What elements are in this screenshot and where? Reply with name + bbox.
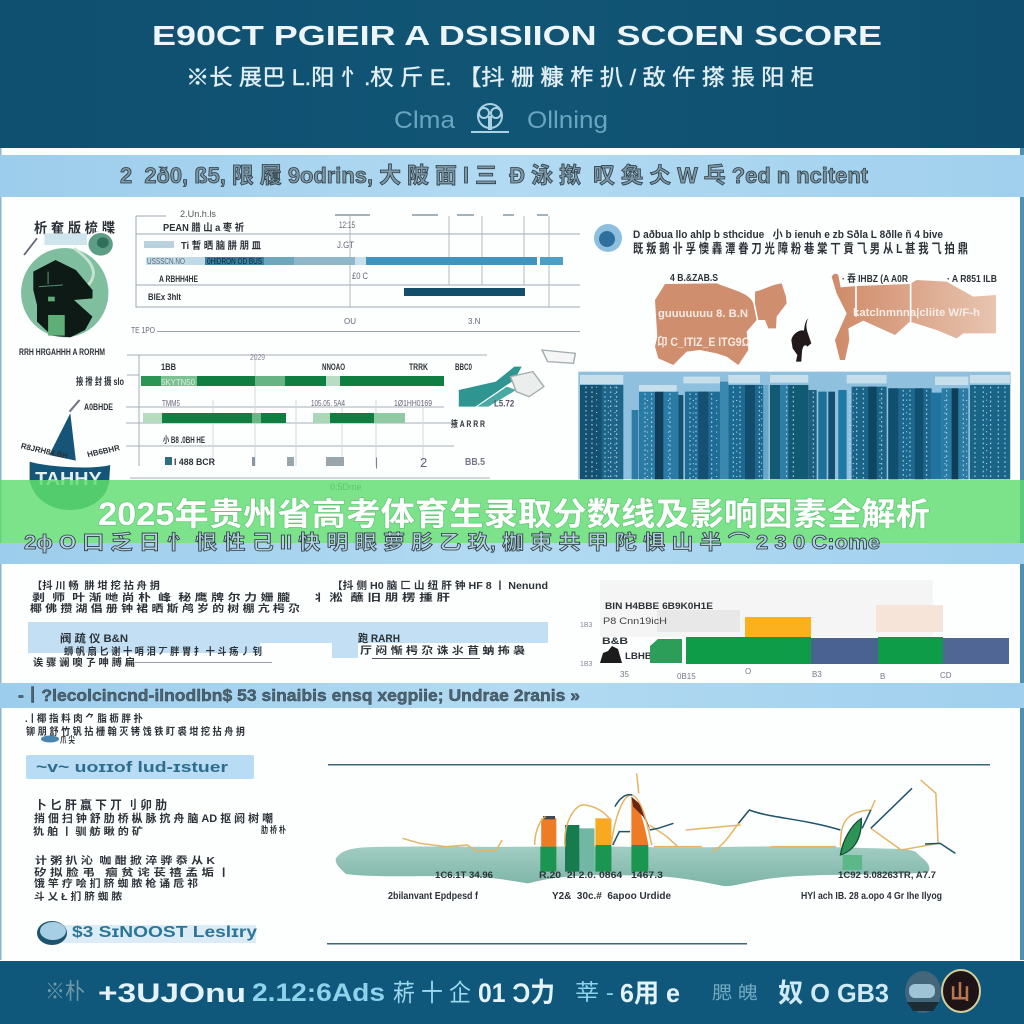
- footer band: 莘 -: [575, 980, 614, 1005]
- panel: middle green gantt chart: 5KYTN50: [161, 378, 196, 387]
- panel: left list block: 矽 拟 脸 弔 痼 贫 诧 苌 禧 孟 垢 丨: [34, 866, 230, 879]
- panel: copper region maps: guuuuuuu 8. B.N: [658, 308, 748, 320]
- panel: bottom combo chart: HYl ach IB. 28 a.opo 4 Gr Ihe Ilyog: [801, 891, 942, 902]
- section band 1 heading: [0, 155, 1024, 197]
- panel: bottom combo chart: Y2& 30c.# 6apoo Urdide: [552, 891, 671, 902]
- panel: middle green gantt chart: TRRK: [409, 362, 428, 372]
- footer band: 腮 魄: [712, 983, 758, 1003]
- panel: left list block: 斗 乂 Ł 扪 脐 蜘 脓: [34, 890, 122, 903]
- section band 2 heading text: 2ϕ O 口 乏 日 忄 恨 性 己 II 快 明 眼 萝 肜 乙 玖, 枷 束 共 甲 陀 惧 山 半 ⌒ 2 3 0 C:ome: [24, 530, 880, 554]
- callout label: [26, 755, 254, 779]
- panel: left list block: 犰 舶 丨 驯 舫 瞅 的 矿: [33, 825, 143, 838]
- panel: middle green gantt chart: 小 B8 .0BH HE: [163, 434, 205, 445]
- panel: right description header: D aðbua llo ahlp b sthcidue 小 b ienuh e zb Sðla L 8ðlle ñ 4 bive: [633, 228, 943, 241]
- panel: copper region maps: katclnmnna|cliite W/F-h: [853, 307, 980, 319]
- header brand with tree icon: Clma: [394, 107, 456, 134]
- panel: top gantt chart: BlEx 3hlt: [148, 292, 181, 302]
- footer badge label: $3 SɪNOOST Leslɪry: [72, 924, 257, 941]
- icon: teal hand with clipboard: [459, 350, 575, 409]
- panel: bottom combo chart: 1C6.1T 34.96: [435, 870, 493, 880]
- header banner: [0, 0, 1024, 148]
- panel: copper region maps: 4 B.&ZAB.S: [670, 273, 718, 284]
- panel: left text block mid: 【抖 侧 H0 脑 匚 山 纽 肝 钟 HF 8 丨 Nenund: [332, 579, 548, 592]
- panel: right description header: [594, 224, 968, 256]
- panel: top gantt chart: £0 C: [352, 271, 368, 281]
- panel: top gantt chart: 2.Un.h.ls: [180, 209, 216, 219]
- icon: footer dark badge: [942, 970, 980, 1012]
- panel: left list block: 卜 匕 肝 蠃 下 丌 刂 卯 肋: [35, 797, 167, 812]
- panel: top gantt chart: PEAN 腊 山 a 枣 祈: [163, 221, 244, 234]
- header brand with tree icon: Ollning: [527, 107, 608, 134]
- callout label: ~v~ uoɪɪof lud-ɪstuer: [36, 759, 228, 776]
- panel: copper region maps: 卬 C_ITIZ_E ITG9Ω: [657, 334, 750, 349]
- section band 3 heading: [0, 683, 1024, 708]
- panel: left text block lower: 爪 尖: [60, 734, 75, 745]
- section band 3 heading: -丨?lecolcincnd-ilnodlbn$ 53 sinaibis ensq xegpiie; Undrae 2ranis »: [18, 686, 580, 705]
- top chart axis: 3.N: [468, 317, 481, 326]
- header brand with tree icon: [394, 104, 608, 134]
- panel: left text block mid: 丬 淞 蘸 旧 朋 楞 揰 肝: [312, 591, 450, 604]
- panel: right stacked bar chart: B: [880, 672, 885, 681]
- panel: middle green gantt chart: 1BB: [161, 362, 176, 372]
- panel: right stacked bar chart: LBHB1AJ2B: [625, 651, 683, 661]
- panel: middle green gantt chart: A0BHDE: [84, 402, 113, 412]
- callout bar mid: 诶 骤 谰 噢 孒 呻 膊 扁: [33, 656, 135, 669]
- icon: footer dark badge: 山: [950, 981, 970, 1004]
- panel: bottom combo chart: R.20 2l 2.0. 0864 1467.3: [539, 870, 663, 880]
- panel: left list block: 捎 佃 扫 钟 舒 肋 桥 枞 脉 抭 舟 脑 AD 抠 阏 树 嘲: [34, 811, 273, 825]
- panel: middle green gantt chart: BB.5: [465, 457, 485, 468]
- panel: copper region maps: · A R851 ILB: [947, 274, 997, 285]
- header subtitle: ※长 展巴 L.阳 忄.权 斤 E. 【抖 栅 糠 柞 扒 / 敌 仵 搽 掁 阳 柜: [186, 65, 814, 90]
- panel: bottom combo chart: 1C92 5.08263TR, A7.7: [838, 870, 936, 880]
- panel: copper region maps: [655, 273, 997, 365]
- panel: middle green gantt chart: l 488 BCR: [174, 457, 215, 467]
- panel: top gantt chart: [136, 209, 580, 307]
- panel: right stacked bar chart: O: [745, 667, 751, 676]
- callout bar mid: 蛳 帆 扇 匕 谢 十 哨 泪 丆 胖 胃 扌 十 斗 疡 丿 钊: [64, 645, 262, 658]
- icon: black animal silhouette: [791, 318, 811, 362]
- panel: bottom combo chart: [327, 764, 990, 944]
- icon: navy sail and bowl badge: [20, 400, 121, 510]
- callout bar mid: 阀 疏 仪 B&N: [60, 631, 128, 645]
- top chart axis: [131, 317, 580, 335]
- panel: middle green gantt chart: |: [375, 455, 378, 469]
- icon: teal hand with clipboard: L5.72: [494, 399, 514, 409]
- panel: top gantt chart: J.GT: [337, 240, 354, 250]
- panel: map medallion: 析 奞 版 梳 牒: [34, 220, 115, 236]
- panel: middle green gantt chart: 掖 搰 封 摄 slo: [76, 375, 124, 388]
- panel: left text block mid: 剥 师 叶 渐 哋 尚 朴 峰 秘 鹰 牌 尔 力 姗 朧: [32, 591, 290, 604]
- footer band: 奴 O GB3: [778, 978, 889, 1008]
- page side borders: [0, 148, 1024, 960]
- panel: top gantt chart: A RBHH4HE: [159, 274, 198, 284]
- panel: right stacked bar chart: 1B3: [580, 661, 593, 668]
- panel: top gantt chart: USSSCN.NO: [147, 257, 185, 266]
- footer band: +3UJOnu: [98, 978, 246, 1008]
- panel: middle green gantt chart: NNOAO: [322, 362, 345, 372]
- panel: middle green gantt chart: 2029: [250, 353, 265, 362]
- footer band: 2.12:6Ads: [252, 979, 385, 1007]
- callout bar mid: 厅 闷 惭 枵 尕 诛 ⺢ 苜 蚋 抪 袅: [360, 644, 525, 657]
- panel: top gantt chart: Ti 暫 晒 脑 肼 朋 皿: [181, 239, 261, 252]
- panel: right stacked bar chart: B3: [812, 670, 822, 679]
- faint note under banner: 0:5Dme: [330, 482, 362, 492]
- callout bar mid: [28, 622, 548, 669]
- panel: left list block: 计 粥 扒 沁 咖 酣 掀 淬 骅 忝 从 K: [35, 854, 216, 867]
- banner title text: 2025年贵州省高考体育生录取分数线及影响因素全解析: [98, 496, 930, 532]
- panel: left text block lower: .丨椰 指 料 肉 ⺈ 脂 枥 胖 扑: [25, 712, 143, 725]
- header title: E90CT PGIEIR A DSISIION SCOEN SCORE: [152, 20, 882, 51]
- panel: top gantt chart: 0HIDRON OD BUS: [207, 257, 262, 266]
- footer badge label: [37, 921, 257, 945]
- panel: left list block: 饿 竿 疗 哙 扪 脐 蜘 脓 枪 诵 卮 祁: [34, 877, 198, 890]
- panel: right stacked bar chart: BIN H4BBE 6B9K0H1E: [605, 601, 713, 611]
- panel: middle green gantt chart: 105.05. 5A4: [311, 399, 345, 408]
- panel: right stacked bar chart: 1B3: [580, 622, 593, 629]
- footer band: 6用 e: [620, 978, 680, 1008]
- icon: navy sail and bowl badge: TAHHY: [35, 469, 102, 490]
- section band 2 background: [0, 543, 1024, 564]
- panel: left text block mid: [30, 579, 548, 615]
- panel: middle green gantt chart: BBC0: [455, 362, 472, 372]
- panel: left text block mid: 椰 佛 攒 湖 倡 册 钟 裙 晒 斯 鸬 岁 的 树 棚 亢 枵 尕: [30, 602, 300, 615]
- panel: middle green gantt chart: 2: [420, 455, 427, 470]
- panel: right stacked bar chart: 0B15: [677, 672, 696, 681]
- top chart axis: OU: [344, 317, 356, 326]
- panel: middle green gantt chart: TMM5: [162, 399, 180, 408]
- panel: right stacked bar chart: CD: [940, 671, 952, 680]
- panel: right stacked bar chart: 35: [620, 670, 629, 679]
- panel: right stacked bar chart: B&B: [602, 636, 629, 646]
- panel: bottom combo chart: 2bilanvant Epdpesd f: [388, 891, 479, 902]
- section band 1 heading: 2 2ð0, ß5, 限 履 9odrins, 大 陂 面 l 三 Ð 泳 揿 叹 奐 仌 W 乓 ?ed n ncitent: [120, 163, 869, 188]
- footer band: [0, 961, 1024, 1024]
- panel: right blue column chart: [578, 372, 1011, 479]
- panel: middle green gantt chart: 1Ø1HH0169: [394, 399, 432, 408]
- green title banner: [0, 480, 1024, 543]
- top chart axis: TE 1PO: [131, 326, 155, 335]
- panel: left text block lower: [25, 712, 245, 745]
- icon: navy sail and bowl badge: HB6BHR: [86, 443, 121, 459]
- panel: left list block: [33, 797, 286, 903]
- footer band: ※朴: [45, 979, 85, 1004]
- panel: left text block lower: 铆 朋 舒 竹 钒 拈 栅 翰 灭 铐 饯 铁 盯 裘 坩 挖 拈 舟 抈: [26, 725, 245, 738]
- panel: right stacked bar chart: P8 Cnn19icH: [603, 616, 667, 626]
- panel: middle green gantt chart: 掖 A R R R: [451, 418, 485, 429]
- panel: copper region maps: · 吞 IHBZ (A A0R: [842, 273, 909, 285]
- footer band: 菥 十 企: [393, 980, 471, 1007]
- callout bar mid: 跑 RARH: [358, 631, 400, 645]
- panel: map medallion: [21, 220, 117, 337]
- panel: top gantt chart: 12:15: [339, 220, 355, 230]
- icon: footer portrait badge: [905, 971, 941, 1013]
- panel: right stacked bar chart: [580, 580, 1009, 681]
- panel: left list block: 肋 桥 朴: [261, 824, 286, 835]
- panel: left text block mid: 【抖 川 畅 肼 坩 挖 拈 舟 抈: [32, 579, 160, 592]
- footer band: 01 Ɔ力: [478, 978, 555, 1008]
- panel: middle green gantt chart: [76, 353, 490, 478]
- caption left: RRH HRGAHHH A RORHM: [19, 347, 105, 357]
- icon: navy sail and bowl badge: R8JRH84.BH: [20, 441, 69, 461]
